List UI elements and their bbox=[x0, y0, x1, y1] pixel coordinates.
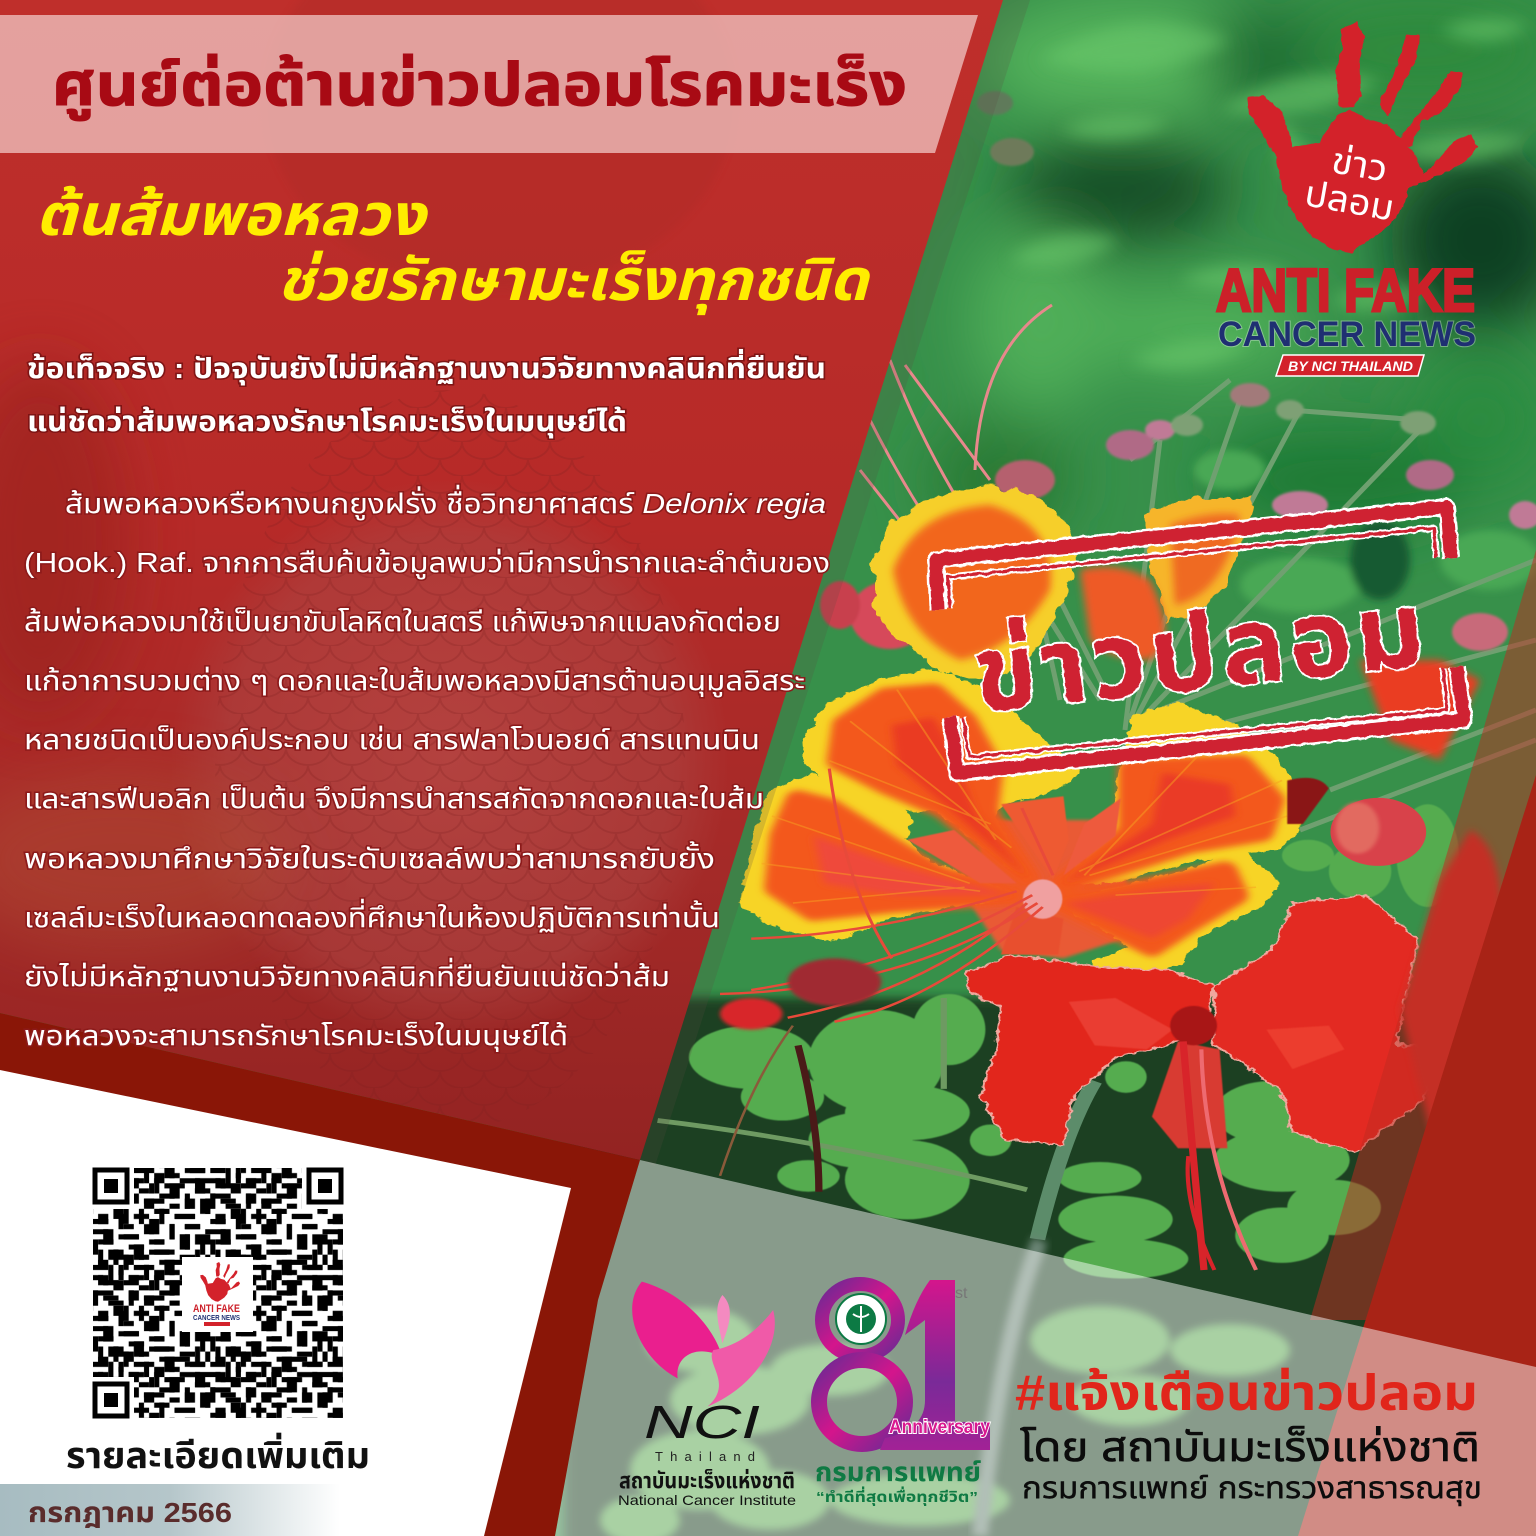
logo: 81st anniversary bbox=[815, 1280, 990, 1506]
lower leaves backdrop bbox=[564, 804, 1536, 1536]
logo: Anti Fake Cancer News bbox=[1216, 23, 1477, 376]
wordmark: CANCER NEWS: CANCER NEWS bbox=[1218, 315, 1476, 354]
badge: BY NCI THAILAND bbox=[1276, 355, 1424, 376]
pink stamens upper bbox=[860, 305, 1052, 540]
upper flowers: orange interiors bbox=[893, 505, 1480, 760]
headline: claim in yellow bbox=[35, 183, 870, 316]
centre fill behind petals bbox=[965, 820, 1136, 958]
yellow rims bbox=[743, 672, 1298, 982]
body paragraph: ส้มพ่อหลวงมาใช้เป็นยาขับโลหิตในสตรี แก้พิษจากแมลงกัดต่อย bbox=[24, 606, 781, 637]
fact statement: แน่ชัดว่าส้มพอหลวงรักษาโรคมะเร็งในมนุษย์ได้ bbox=[27, 406, 627, 438]
hand text: ข่าว bbox=[1329, 140, 1391, 190]
QR centre logo: CANCER NEWS bbox=[193, 1315, 240, 1322]
logo: National Cancer Institute bbox=[618, 1282, 796, 1508]
finder top left bbox=[93, 1168, 134, 1209]
stamp top bracket bbox=[936, 507, 1451, 610]
body paragraph: ยังไม่มีหลักฐานงานวิจัยทางคลินิกที่ยืนยันแน่ชัดว่าส้ม bbox=[24, 957, 670, 992]
right side veil bbox=[1310, 550, 1536, 1320]
wordmark: ANTI FAKE: ANTI FAKE bbox=[1216, 257, 1475, 324]
centre petals bbox=[907, 796, 1121, 954]
finder bottom left bbox=[93, 1377, 134, 1418]
body paragraph: แก้อาการบวมต่าง ๆ ดอกและใบส้มพอหลวงมีสารต้านอนุมูลอิสระ bbox=[24, 665, 805, 698]
issuer line 2: กรมการแพทย์ กระทรวงสาธารณสุข bbox=[1022, 1472, 1482, 1506]
Anniversary: Anniversary bbox=[889, 1417, 990, 1438]
panel: white QR section bbox=[0, 1070, 571, 1536]
NCI script: NCI bbox=[644, 1396, 760, 1448]
orange interiors enlarged bbox=[777, 693, 1272, 947]
finder top right bbox=[302, 1168, 343, 1209]
cell texture: red blood cell behind header bbox=[265, 0, 735, 290]
date band: กรกฎาคม 2566 bbox=[28, 1497, 232, 1528]
right side petals through veil bbox=[1400, 830, 1502, 1130]
hashtag and issuer bbox=[1015, 1365, 1482, 1506]
Thailand label: Thailand bbox=[655, 1449, 755, 1464]
body paragraph: และสารฟีนอลิก เป็นต้น จึงมีการนำสารสกัดจากดอกและใบส้ม bbox=[24, 783, 764, 814]
department name: กรมการแพทย์ bbox=[815, 1457, 981, 1487]
body paragraph: พอหลวงจะสามารถรักษาโรคมะเร็งในมนุษย์ได้ bbox=[24, 1020, 568, 1052]
QR centre logo bbox=[182, 1257, 253, 1332]
panel: translucent footer overlay bbox=[555, 1160, 1536, 1536]
fact statement: ข้อเท็จจริง : ปัจจุบันยังไม่มีหลักฐานงานวิจัยทางคลินิกที่ยืนยัน bbox=[27, 348, 826, 385]
deep red centres bbox=[814, 717, 1235, 939]
body paragraph: พอหลวงมาศึกษาวิจัยในระดับเซลล์พบว่าสามารถยับยั้ง bbox=[24, 841, 715, 874]
hand text bbox=[1302, 140, 1397, 229]
body paragraph bbox=[24, 484, 830, 1052]
red flower centre petals bbox=[1023, 778, 1344, 1148]
headline: claim in yellow: ช่วยรักษามะเร็งทุกชนิด bbox=[277, 248, 870, 316]
foliage: blurred background leaves bbox=[930, 0, 1536, 540]
icon: red hand print bbox=[1248, 23, 1477, 252]
leaves under footer bbox=[600, 1306, 1290, 1536]
NCI English name: National Cancer Institute bbox=[618, 1492, 796, 1508]
emblem bbox=[836, 1294, 886, 1344]
hashtag: #แจ้งเตือนข่าวปลอม bbox=[1015, 1365, 1478, 1421]
body paragraph: ส้มพอหลวงหรือหางนกยูงฝรั่ง ชื่อวิทยาศาสตร์ Delonix regia bbox=[65, 484, 826, 521]
body paragraph: (Hook.) Raf. จากการสืบค้นข้อมูลพบว่ามีการนำรากและลำต้นของ bbox=[24, 547, 830, 580]
panel: right red band bbox=[1298, 775, 1536, 1536]
issuer line 1: โดย สถาบันมะเร็งแห่งชาติ bbox=[1020, 1424, 1480, 1470]
leaf fronds top bbox=[1010, 19, 1530, 370]
stamp: fake news bbox=[936, 507, 1464, 773]
panel: left red background with cell images bbox=[0, 0, 1003, 1160]
headline: claim in yellow: ต้นส้มพอหลวง bbox=[35, 183, 428, 248]
stamp bottom bracket bbox=[950, 667, 1464, 773]
numeral 8 bbox=[819, 1284, 905, 1444]
veil strip along panel edge bbox=[640, 0, 1030, 1166]
department slogan: “ทำดีที่สุดเพื่อทุกชีวิต” bbox=[816, 1486, 978, 1506]
panel: dark red wedge under main panel bbox=[0, 1013, 640, 1536]
st superscript: st bbox=[955, 1285, 968, 1302]
badge: BY NCI THAILAND: BY NCI THAILAND bbox=[1288, 358, 1413, 374]
icon: pink butterfly bbox=[632, 1282, 775, 1407]
stems fan bbox=[1000, 380, 1536, 830]
NCI Thai name: สถาบันมะเร็งแห่งชาติ bbox=[619, 1468, 795, 1493]
numeral 1 bbox=[880, 1280, 990, 1450]
stamp text: ข่าวปลอม bbox=[968, 570, 1430, 735]
red bud bbox=[1330, 798, 1426, 866]
header band bbox=[0, 15, 978, 153]
body paragraph: เซลล์มะเร็งในหลอดทดลองที่ศึกษาในห้องปฏิบัติการเท่านั้น bbox=[24, 898, 720, 933]
petal streaks bbox=[762, 690, 1287, 903]
upper flowers: yellow rims bbox=[875, 485, 1250, 680]
grey thorny stem under footer bbox=[980, 1240, 1040, 1536]
hand text: ปลอม bbox=[1302, 173, 1397, 229]
title: ศูนย์ต่อต้านข่าวปลอมโรคมะเร็ง bbox=[52, 51, 907, 121]
QR code bbox=[93, 1168, 343, 1418]
date band bbox=[0, 1484, 340, 1536]
QR centre logo: ANTI FAKE bbox=[193, 1303, 240, 1315]
cell texture: round tumour cell bbox=[170, 390, 730, 1130]
long stamens bbox=[720, 769, 1256, 1270]
fact statement bbox=[27, 348, 826, 438]
QR caption: รายละเอียดเพิ่มเติม bbox=[66, 1432, 370, 1476]
big orange flower and red flower bbox=[720, 672, 1443, 1270]
buds bbox=[820, 91, 1536, 655]
body paragraph: หลายชนิดเป็นองค์ประกอบ เช่น สารฟลาโวนอยด์ สารแทนนิน bbox=[24, 724, 760, 755]
red flower petals bbox=[965, 895, 1443, 1152]
leaves mid-green behind buds bbox=[1194, 450, 1536, 613]
